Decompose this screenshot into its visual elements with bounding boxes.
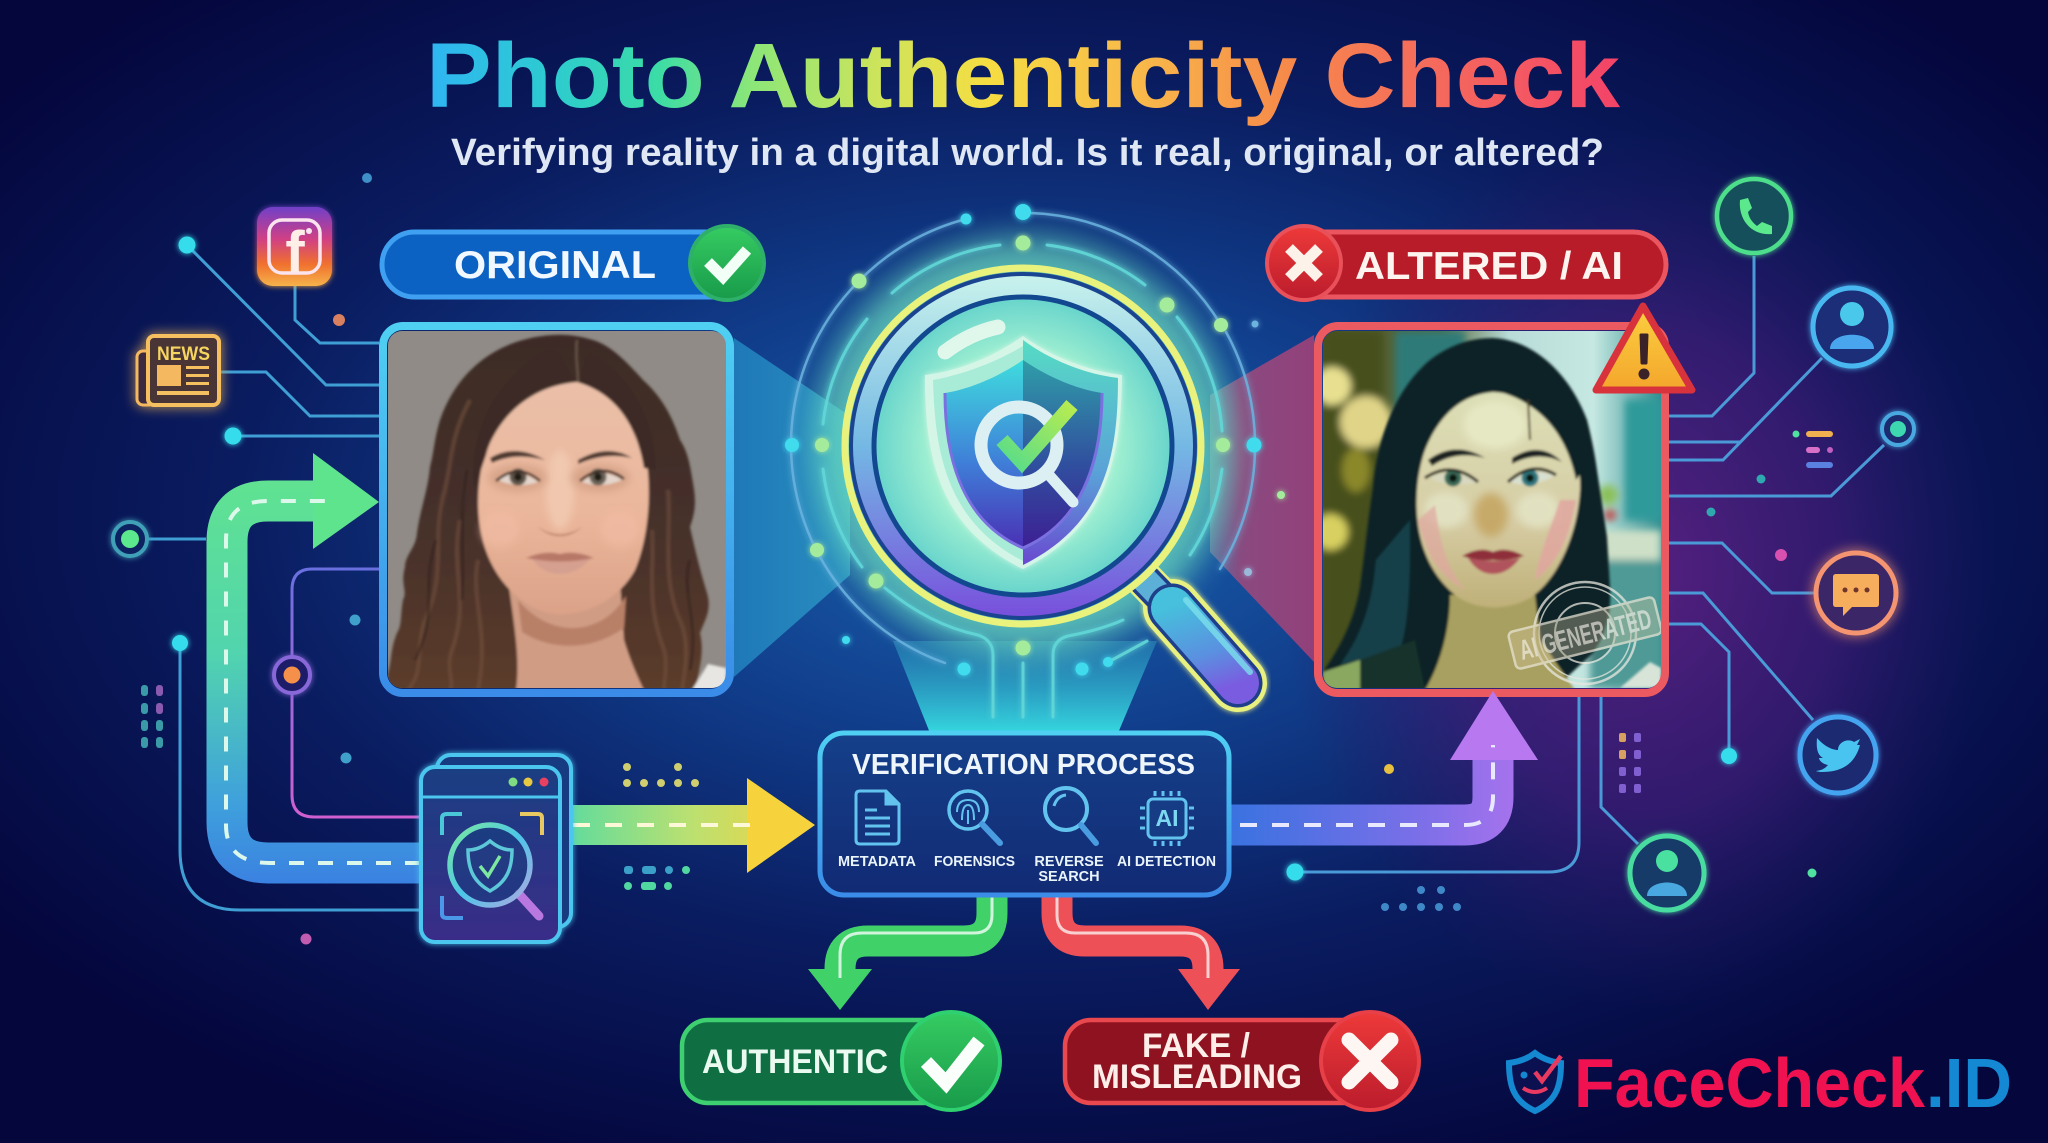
shield xyxy=(925,336,1122,569)
label: reverse search: REVERSE xyxy=(1034,854,1104,870)
icon: document xyxy=(856,791,899,844)
check mark xyxy=(1002,405,1072,462)
heading: VERIFICATION PROCESS xyxy=(852,749,1195,781)
icon: chat xyxy=(1816,553,1896,633)
label: metadata: METADATA xyxy=(838,854,917,870)
badge: fake or misleading: MISLEADING xyxy=(1092,1058,1302,1096)
badge: altered xyxy=(1267,226,1666,300)
icon: red cross xyxy=(1267,226,1341,300)
lens halo xyxy=(815,238,1231,654)
stamp: AI generated: AI GENERATED xyxy=(1516,603,1655,666)
badge: authentic: AUTHENTIC xyxy=(702,1043,888,1081)
arrow: authentic branch xyxy=(808,897,992,1010)
node: green ring xyxy=(113,522,147,556)
photo: original portrait xyxy=(386,331,726,690)
logo: FaceCheck.ID: .ID xyxy=(1926,1044,2012,1122)
magnifier handle xyxy=(1140,575,1250,683)
label: reverse search xyxy=(1034,854,1104,885)
icon: user blue xyxy=(1813,288,1891,366)
icon: check xyxy=(902,1012,1000,1110)
label: reverse search: SEARCH xyxy=(1038,869,1100,885)
badge: fake or misleading: FAKE / xyxy=(1142,1027,1251,1065)
badge: original xyxy=(382,226,764,300)
icon: AI chip: AI xyxy=(1156,805,1178,831)
icon: cross xyxy=(1321,1012,1419,1110)
icon: phone xyxy=(1717,179,1791,253)
panel: original photo xyxy=(383,326,730,693)
dot grids xyxy=(141,430,1833,911)
beam: original to lens xyxy=(734,338,850,677)
icon: AI chip xyxy=(1140,791,1194,846)
icon: magnifier xyxy=(1045,788,1096,843)
subtitle: Verifying reality in a digital world. Is it real, original, or altered? xyxy=(451,132,1604,174)
small scattered dots xyxy=(300,173,1816,944)
photo frame xyxy=(383,326,730,693)
icon: green check xyxy=(690,226,764,300)
photo: altered portrait xyxy=(1312,331,1662,690)
badge: original: ORIGINAL xyxy=(454,244,656,287)
icon: news xyxy=(137,336,219,405)
right circuit lines xyxy=(1296,256,1884,872)
node: orange ring xyxy=(274,657,310,693)
beam: lens to verification box xyxy=(893,641,1157,733)
photo frame xyxy=(1318,326,1665,693)
panel: verification process xyxy=(820,733,1229,895)
icon: social app: f xyxy=(285,220,305,285)
lens arcs and nodes xyxy=(785,204,1285,717)
window icon: scanner xyxy=(421,755,571,942)
icon: user green xyxy=(1630,836,1704,910)
purple arrow xyxy=(1231,691,1538,825)
yellow arrow xyxy=(570,778,815,873)
node: teal ring xyxy=(1882,413,1914,445)
node: cyan dots xyxy=(172,236,1737,880)
icon: social app xyxy=(257,207,332,286)
icon: news: NEWS xyxy=(157,344,210,365)
title: Photo Authenticity Check xyxy=(426,25,1621,127)
panel: altered photo xyxy=(1312,326,1665,693)
search icon xyxy=(981,407,1073,502)
lens highlight xyxy=(945,327,998,352)
icon: bird xyxy=(1800,717,1876,793)
logo: FaceCheck.ID: FaceCheck xyxy=(1574,1044,1925,1122)
icon: warning triangle xyxy=(1596,306,1692,390)
green arrow xyxy=(226,453,425,863)
magnifying glass xyxy=(845,268,1250,683)
stamp: AI generated xyxy=(1508,582,1662,684)
logo shield xyxy=(1509,1053,1561,1111)
label: AI detection: AI DETECTION xyxy=(1117,854,1216,870)
icon: fingerprint magnifier xyxy=(949,791,1000,843)
beam: altered to lens xyxy=(1210,335,1314,662)
badge: fake or misleading xyxy=(1065,1012,1419,1110)
badge: altered: ALTERED / AI xyxy=(1355,245,1623,288)
badge: authentic xyxy=(682,1012,1000,1110)
label: forensics: FORENSICS xyxy=(934,854,1015,870)
left circuit lines xyxy=(148,245,421,910)
arrow: fake branch xyxy=(1057,897,1240,1010)
